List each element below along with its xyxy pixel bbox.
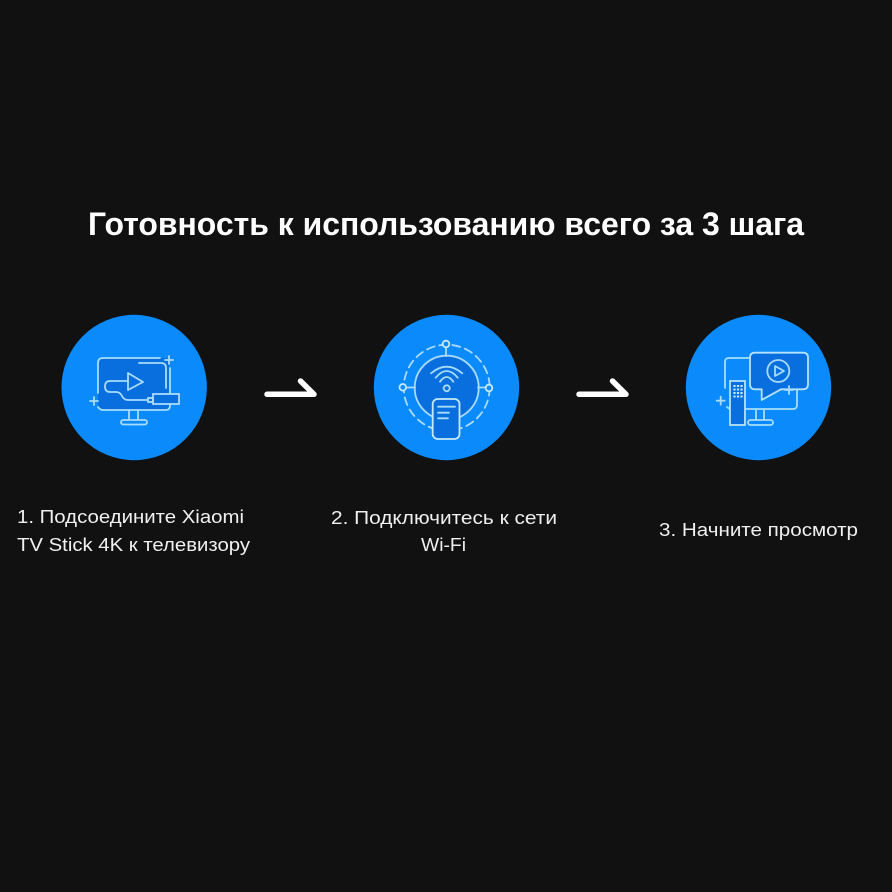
step 2 caption: Wi-Fi <box>421 534 466 555</box>
step 3 caption: 3. Начните просмотр <box>659 519 858 540</box>
arrow 1 <box>267 381 314 394</box>
arrow 2 <box>579 381 626 394</box>
title: Готовность к использованию всего за 3 шага <box>88 206 804 242</box>
step 3 icon: monitor, remote and chat bubble <box>686 315 831 460</box>
step 2 caption: 2. Подключитесь к сети <box>331 507 557 528</box>
step 1 caption <box>17 506 251 555</box>
step 2 caption <box>331 507 557 555</box>
step 1 icon: monitor with TV stick <box>62 315 207 460</box>
step 1 caption: 1. Подсоедините Xiaomi <box>17 506 244 527</box>
step 1 caption: TV Stick 4K к телевизору <box>17 534 251 555</box>
step 2 icon: Wi-Fi device <box>374 315 519 460</box>
